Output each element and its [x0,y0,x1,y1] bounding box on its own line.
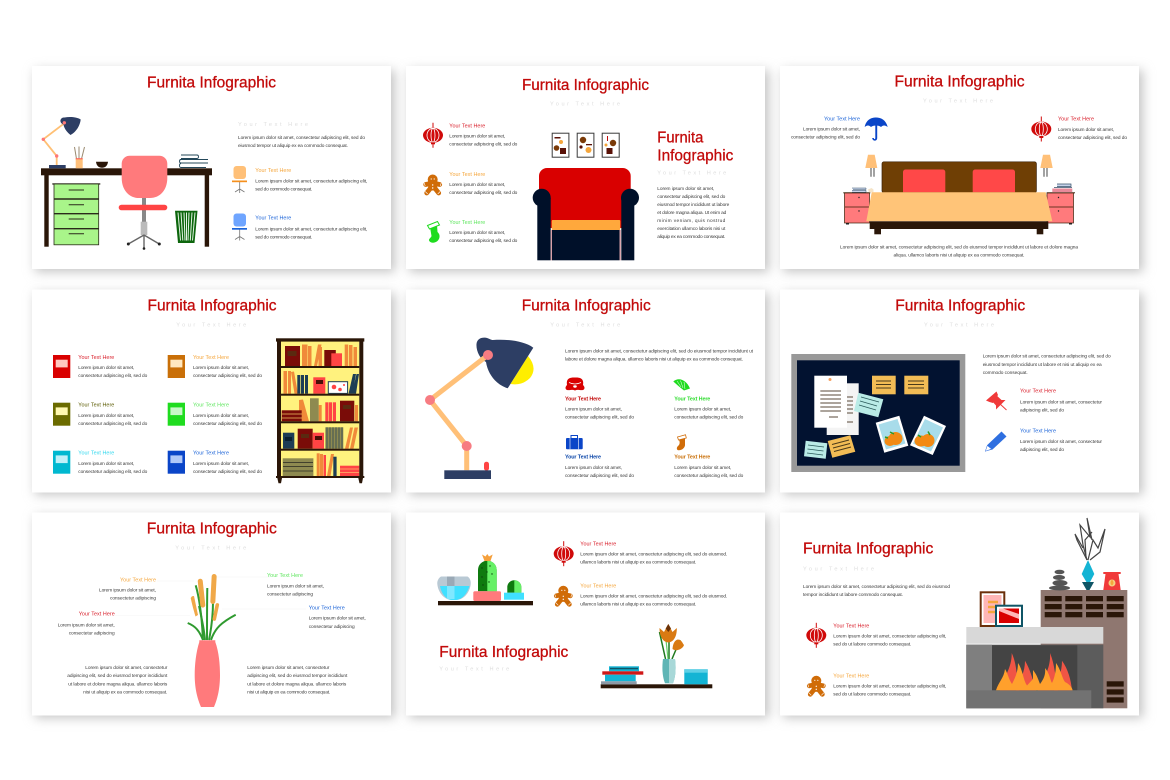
side subtitle: Your Text Here [657,170,726,176]
intro text [803,584,950,598]
bottom text [840,244,1078,258]
card [32,290,391,492]
text block right: adipiscing elit, sed do eiusmod tempor incididunt [247,673,348,679]
item: red: sed do ut labore commodo consequat. [833,642,911,648]
illustration: bookcase [276,338,364,483]
callout: green [267,573,324,598]
callout: blue [309,605,366,630]
subtitle: Your Text Here [550,102,620,108]
icon: orange chair [232,166,247,193]
subtitle: Your Text Here [176,322,246,328]
item: cyan: consectetur adipiscing elit, sed do [78,469,148,475]
callout: green: Lorem ipsum dolor sit amet, [267,584,324,590]
illustration: desk [41,117,212,250]
icon: blue book [168,451,185,474]
item: blue: consectetur adipiscing elit, sed do [565,473,634,479]
intro text: Lorem ipsum dolor sit amet, consectetur adipiscing elit, sed do [983,354,1111,360]
text block right: nisi ut aliquip ex ea commodo consequat. [247,690,330,696]
item: orange: Lorem ipsum dolor sit amet, [193,365,249,371]
item: cyan: Lorem ipsum dolor sit amet, [78,461,134,467]
slide 5: lamp [406,290,769,495]
item: red: consectetur adipiscing elit, sed do [565,415,634,421]
icon: stocking [428,222,440,243]
icon: push pin [986,392,1006,410]
item: green: consectetur adipiscing elit, sed do [193,421,262,427]
side text: Lorem ipsum dolor sit amet, [657,186,714,192]
icon: gingerbread [808,676,825,695]
item: blue: Lorem ipsum dolor sit amet, [565,465,622,471]
icon: olive book [53,403,70,426]
title: Furnita Infographic [894,74,1024,91]
intro text: commodo consequat. [983,370,1028,376]
item: cyan [78,450,148,475]
icon: lantern [806,623,826,648]
item: orange: Lorem ipsum dolor sit amet, consectetur adipiscing elit, [833,684,946,690]
illustration: board [791,354,965,472]
callout: orange [99,577,156,602]
item: orange: Your Text Here [193,355,229,361]
item: blue: sed do commodo consequat. [255,234,312,240]
side text: et dolore magna aliqua. Ut enim ad [657,210,727,216]
item: red: Lorem ipsum dolor sit amet, consectetur adipiscing elit, sed do eiusmod. [580,552,727,558]
item: red: Lorem ipsum dolor sit amet, [449,133,505,139]
item: red: Lorem ipsum dolor sit amet, [565,407,622,413]
card shadow [783,70,1143,272]
item: orange [580,583,727,608]
item: olive [78,403,148,427]
item: orange: Lorem ipsum dolor sit amet, consectetur adipiscing elit, [255,179,367,185]
icon: fan [673,379,690,390]
text block right: Lorem ipsum dolor sit amet, consectetur [247,665,330,671]
item: red: Your Text Here [1020,389,1056,395]
item: orange [193,355,262,379]
item: blue: adipiscing elit, sed do [1020,447,1064,453]
item: blue: Your Text Here [193,450,229,456]
item: red: Your Text Here [78,355,114,361]
item: red: ullamco laboris nisi ut aliquip ex ea commodo consequat. [580,560,696,566]
item: red: Your Text Here [1058,117,1094,123]
item: red: Lorem ipsum dolor sit amet, consectetur adipiscing elit, [833,634,946,640]
slide 4: bookcase [32,290,395,495]
item: red: Your Text Here [580,541,616,547]
card shadow [409,516,769,718]
title: Furnita Infographic [522,297,651,314]
item: red [78,355,148,379]
item: green: Your Text Here [193,403,229,409]
intro text: eiusmod tempor incididunt ut labore et nisi ut aliquip ex ea [983,362,1102,368]
item: green: Lorem ipsum dolor sit amet, [193,413,249,419]
card [32,66,391,269]
callout: blue: Your Text Here [309,605,345,611]
item: red [833,623,946,648]
slide 8: shelves [406,512,769,718]
item: red [1020,389,1102,413]
item: green: Your Text Here [674,396,710,402]
slide 1: desk [32,66,395,272]
item: red: consectetur adipiscing elit, sed do [1058,135,1127,141]
callout: blue: consectetur adipiscing [309,624,355,630]
item: red: Lorem ipsum dolor sit amet, consectetur [1020,399,1102,405]
subtitle: Your Text Here [439,667,509,673]
slide 7: vase [32,512,395,718]
item: blue: Lorem ipsum dolor sit amet, [803,127,860,133]
illustration: vase with reeds [115,574,306,707]
title: Furnita Infographic [895,297,1025,314]
card shadow [409,293,769,495]
title: Furnita Infographic [147,74,276,92]
title: Furnita Infographic [439,644,568,661]
item: orange: consectetur adipiscing elit, sed do [193,373,262,379]
item: green [449,220,518,244]
illustration: lower shelf [601,624,712,688]
intro text [983,354,1111,376]
item: olive: Your Text Here [78,403,114,409]
item: red [565,396,634,421]
intro text: eiusmod tempor ut aliquip ex ea commodo consequat. [238,143,348,149]
card shadow [35,516,395,718]
item: orange: Your Text Here [255,168,291,174]
item: orange: Lorem ipsum dolor sit amet, consectetur adipiscing elit, sed do eiusmod. [580,594,727,600]
illustration: armchair [533,168,639,260]
icon: umbrella [865,118,888,141]
icon: lantern [554,541,574,566]
item: orange: sed do ut labore commodo consequat. [833,692,911,698]
callout: orange: Your Text Here [120,577,156,583]
item: blue: Lorem ipsum dolor sit amet, consectetur [1020,439,1102,445]
card [780,290,1139,492]
callout: red: Your Text Here [79,612,115,618]
text block left: Lorem ipsum dolor sit amet, consectetur [85,665,168,671]
item: red [580,541,727,566]
callout: orange: consectetur adipiscing [110,596,156,602]
card [406,512,765,716]
bottom text: aliqua. ullamco laboris nisi ut aliquip ex ea commodo consequat. [894,252,1024,258]
side text: exercitation ullamco laboris nisi ut [657,226,726,232]
subtitle: Your Text Here [923,99,993,105]
bottom text: Lorem ipsum dolor sit amet, consectetur adipiscing elit, sed do eiusmod tempor incididunt ut labore et dolore magna [840,244,1078,250]
subtitle: Your Text Here [803,566,874,572]
item: blue: Your Text Here [824,116,860,122]
icon: cyan book [53,451,70,474]
title: Furnita Infographic [147,520,277,537]
side text: eiusmod tempor incididunt ut labore [657,202,730,208]
title: Furnita Infographic [148,297,276,314]
side text [657,186,730,240]
item: orange: Lorem ipsum dolor sit amet, [674,465,731,471]
side text: consectetur adipiscing elit, sed do [657,194,726,200]
item: blue: Your Text Here [1020,429,1056,435]
card [32,512,391,716]
card shadow [35,293,395,495]
illustration: bed [843,155,1075,234]
text block left [67,665,168,696]
illustration: lamp [425,338,534,479]
icon: green book [168,403,185,426]
icon: blue chair [232,214,247,240]
side heading [657,130,733,165]
item: red: Your Text Here [449,123,485,129]
slide 6: pin board [780,290,1143,495]
icon: suitcase [566,436,583,449]
item: blue [193,450,262,475]
item: blue: Lorem ipsum dolor sit amet, [193,461,249,467]
item: blue: consectetur adipiscing elit, sed do [791,135,860,141]
card [780,66,1139,269]
text block right: ut labore et dolore magna aliqua. ullamco laboris [247,681,347,687]
callout: green: Your Text Here [267,573,303,579]
icon: hat [566,377,584,390]
card [780,512,1139,716]
item: orange [449,172,518,196]
title: Furnita Infographic [522,77,649,94]
item: green: consectetur adipiscing elit, sed do [449,238,518,244]
icon: pencil [985,432,1006,451]
item: green [674,396,744,421]
item: green [193,403,262,427]
icon: orange book [168,355,185,378]
text block left: ut labore et dolore magna aliqua. ullamco laboris [68,681,168,687]
item: orange: Your Text Here [674,455,710,461]
item: red: consectetur adipiscing elit, sed do [449,141,518,147]
intro text: labore et dolore magna aliqua. ullamco laboris nisi ut aliquip ex ea commodo consequat. [565,357,743,363]
item: blue [255,216,367,240]
text block left: nisi ut aliquip ex ea commodo consequat. [83,690,167,696]
callout: orange: Lorem ipsum dolor sit amet, [99,588,156,594]
icon: red book [53,355,70,378]
item: orange: sed do commodo consequat. [255,187,312,193]
side text: minim veniam, quis nostrud [657,218,726,224]
item: orange: Lorem ipsum dolor sit amet, [449,182,505,188]
intro text: Lorem ipsum dolor sit amet, consectetur adipiscing elit, sed do [238,135,365,141]
title: Furnita Infographic [803,541,933,558]
icon: gingerbread [555,586,572,605]
callout: blue: Lorem ipsum dolor sit amet, [309,616,366,622]
slide 2: armchair [406,66,769,272]
item: blue: Your Text Here [255,216,291,222]
side heading: Infographic [657,148,733,165]
text block right [247,665,348,696]
icon: lantern [423,123,443,148]
card shadow [783,516,1143,718]
item: olive: consectetur adipiscing elit, sed do [78,421,148,427]
item: orange: Your Text Here [449,172,485,178]
card shadow [783,293,1143,495]
item: orange [255,168,367,193]
item: orange [674,455,744,479]
item: red: adipiscing elit, sed do [1020,407,1064,413]
card shadow [409,70,769,272]
intro text [565,349,754,363]
card shadow [35,70,395,272]
subtitle: Your Text Here [924,322,994,328]
icon: gingerbread [424,174,441,194]
subtitle: Your Text Here [550,322,620,328]
intro text: tempor incididunt ut labore commodo consequat. [803,592,903,598]
subtitle: Your Text Here [238,122,308,128]
item: orange: consectetur adipiscing elit, sed do [449,190,518,196]
callout: red: Lorem ipsum dolor sit amet, [58,622,115,628]
item: orange [833,673,946,698]
item: green: Your Text Here [449,220,485,226]
item: red: Lorem ipsum dolor sit amet, [78,365,134,371]
item: blue [1020,429,1102,453]
item: green: Lorem ipsum dolor sit amet, [674,407,731,413]
callout: red: consectetur adipiscing [69,630,115,636]
side heading: Furnita [657,130,703,147]
intro text: Lorem ipsum dolor sit amet, consectetur adipiscing elit, sed do eiusmod tempor incididunt ut [565,349,754,355]
item: green: Lorem ipsum dolor sit amet, [449,230,505,236]
callout: red [58,612,115,636]
item: blue: Lorem ipsum dolor sit amet, consectetur adipiscing elit, [255,226,367,232]
illustration: upper shelf [437,554,533,605]
icon: stocking [677,435,686,450]
callout: green: consectetur adipiscing [267,592,313,598]
item: red: Your Text Here [833,623,869,629]
item: red: consectetur adipiscing elit, sed do [78,373,148,379]
picture frames [552,133,619,157]
item: blue: Your Text Here [565,455,601,461]
item: red [449,123,518,147]
subtitle: Your Text Here [175,545,246,551]
item: blue [791,116,860,141]
item: blue: consectetur adipiscing elit, sed do [193,469,262,475]
item: orange: consectetur adipiscing elit, sed do [674,473,744,479]
item: blue [565,455,634,479]
intro text: Lorem ipsum dolor sit amet, consectetur adipiscing elit, sed do eiusmod [803,584,950,590]
icon: lantern [1031,116,1051,142]
side text: aliquip ex ea commodo consequat. [657,234,725,240]
item: red: Lorem ipsum dolor sit amet, [1058,127,1114,133]
card [406,290,765,492]
item: red [1058,117,1127,141]
item: orange: Your Text Here [833,673,869,679]
item: cyan: Your Text Here [78,450,114,456]
text block left: adipiscing elit, sed do eiusmod tempor incididunt [67,673,168,679]
item: orange: ullamco laboris nisi ut aliquip ex ea commodo consequat. [580,602,696,608]
slide 9: fireplace [780,512,1143,718]
item: orange: Your Text Here [580,583,616,589]
item: olive: Lorem ipsum dolor sit amet, [78,413,134,419]
slide 3: bed [780,66,1143,272]
item: green: consectetur adipiscing elit, sed do [674,415,744,421]
intro text [238,135,365,149]
card [406,66,765,269]
illustration: fireplace [966,518,1127,708]
item: red: Your Text Here [565,396,601,402]
